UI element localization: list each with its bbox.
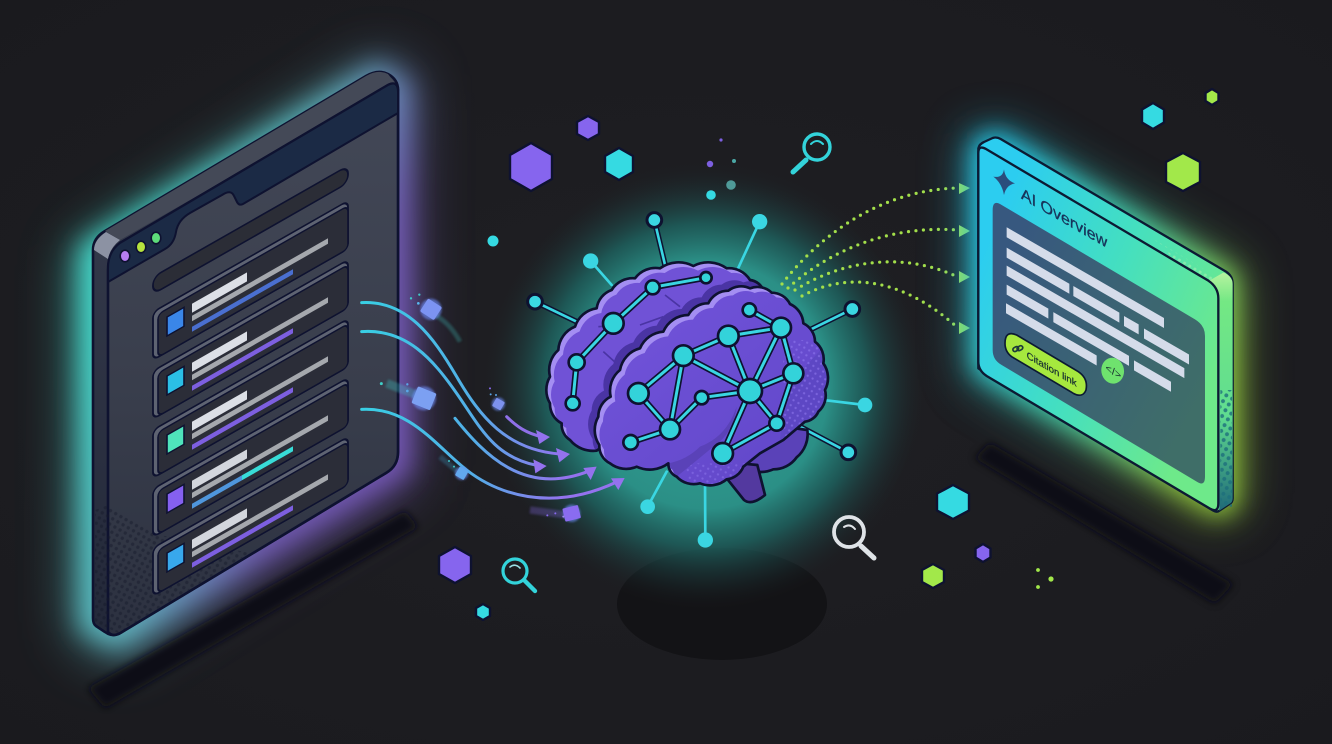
neural links: [573, 278, 793, 453]
result card 1: [153, 201, 348, 360]
card front face: [978, 148, 1218, 510]
brain stem: [727, 463, 765, 502]
result card 2: [153, 260, 348, 419]
result card 4: [153, 378, 348, 537]
shadow: left panel: [88, 511, 418, 708]
card side: [1209, 273, 1233, 511]
citation label: Citation link: [1027, 351, 1077, 390]
panel: search results browser window: [72, 55, 418, 665]
summary text lines: [1006, 227, 1189, 419]
halftone on card side: [1220, 390, 1232, 507]
halftone shading: [95, 505, 250, 633]
result card 5: [153, 437, 348, 596]
brain with neural network: [528, 213, 872, 548]
icon: link: [1012, 344, 1023, 353]
glow: AI Overview card: [967, 127, 1243, 523]
window top bevel: [105, 72, 395, 240]
front hemisphere: [595, 286, 833, 490]
window control dots: [120, 232, 161, 262]
shadow: right panel: [975, 443, 1233, 603]
icon: sparkle: [993, 169, 1015, 195]
floating hexagons: [439, 89, 1218, 620]
card edge top and side: [978, 138, 1233, 512]
window corner highlight: [94, 232, 120, 259]
icon: magnifier top: [793, 134, 830, 172]
result card 3: [153, 319, 348, 478]
cube 1: [420, 298, 442, 320]
cube 5: [562, 505, 581, 522]
icon: magnifier white: [834, 517, 874, 558]
cube 4: [455, 467, 468, 480]
window front face: [108, 84, 398, 635]
arrows: dotted citation paths to AI Overview: [782, 183, 970, 334]
neural nodes: [566, 272, 803, 464]
panel: AI Overview card: [967, 127, 1243, 523]
cube trails: [387, 315, 567, 515]
summary inner panel: [993, 203, 1205, 483]
code chip: [1099, 356, 1126, 385]
data cubes along the streams: [380, 293, 581, 522]
cube 3: [492, 398, 505, 411]
icon: magnifier lower left: [503, 559, 535, 591]
shadow: brain: [617, 548, 827, 660]
cube glow: [412, 299, 580, 522]
title bar with tab: [108, 84, 398, 282]
sparkle dots: [488, 138, 1054, 589]
heading: AI Overview: [1021, 184, 1108, 252]
halftone on card top: [1155, 240, 1217, 283]
cerebellum: [740, 427, 808, 472]
arrows: data streams into the brain: [362, 303, 625, 498]
citation link pill: [1005, 334, 1086, 395]
code symbol: </>: [1106, 362, 1121, 382]
search bar: [153, 166, 348, 294]
outward spokes: [528, 213, 872, 548]
glow: browser window: [72, 55, 418, 665]
cube sparkles: [380, 293, 564, 518]
window body: [93, 72, 398, 635]
back hemisphere: [545, 261, 763, 452]
cube 2: [411, 386, 437, 410]
glow: brain halo: [480, 160, 930, 610]
